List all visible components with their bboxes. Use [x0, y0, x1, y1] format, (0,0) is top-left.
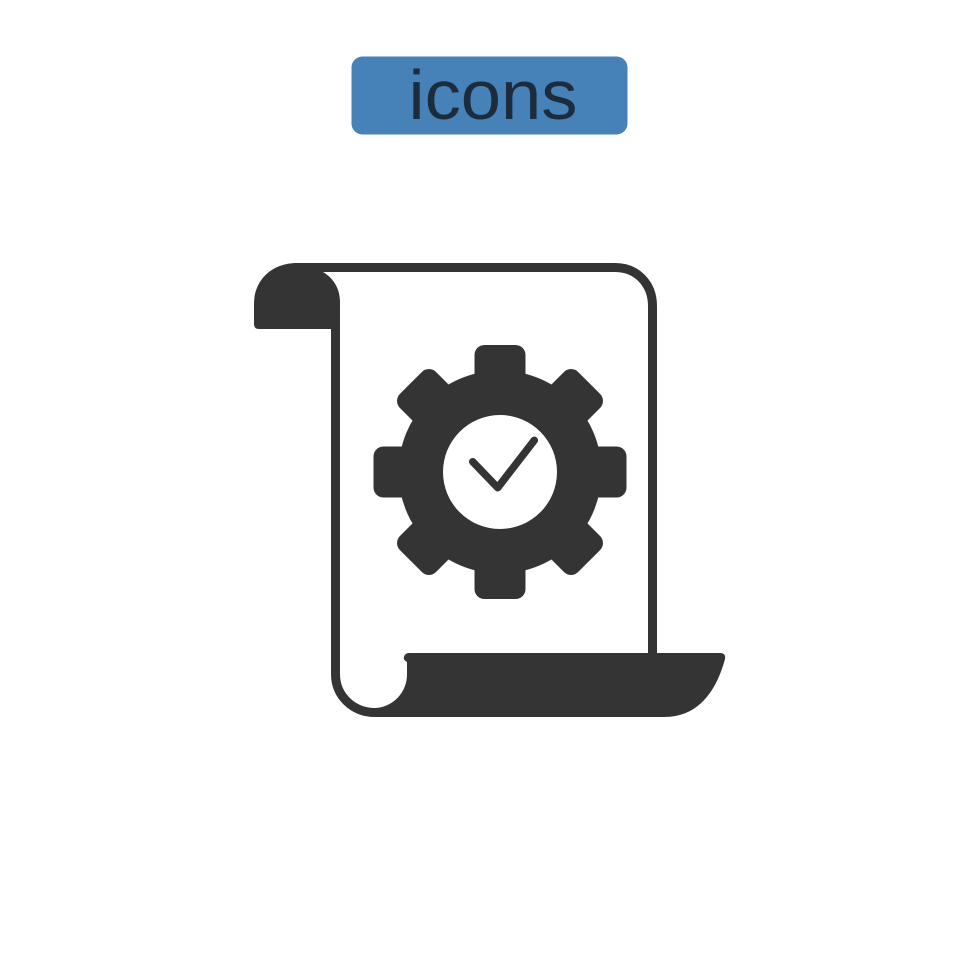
- scroll page outline: [297, 268, 652, 712]
- badge: icons label: [352, 56, 628, 134]
- badge: icons label: icons: [408, 56, 578, 134]
- gear: [374, 345, 626, 599]
- gear centre circle: [443, 415, 557, 529]
- check mark: [473, 440, 534, 488]
- scroll top curl: [254, 263, 340, 329]
- scroll bottom curl: [375, 653, 725, 717]
- icon: document scroll with gear and check: [254, 263, 725, 717]
